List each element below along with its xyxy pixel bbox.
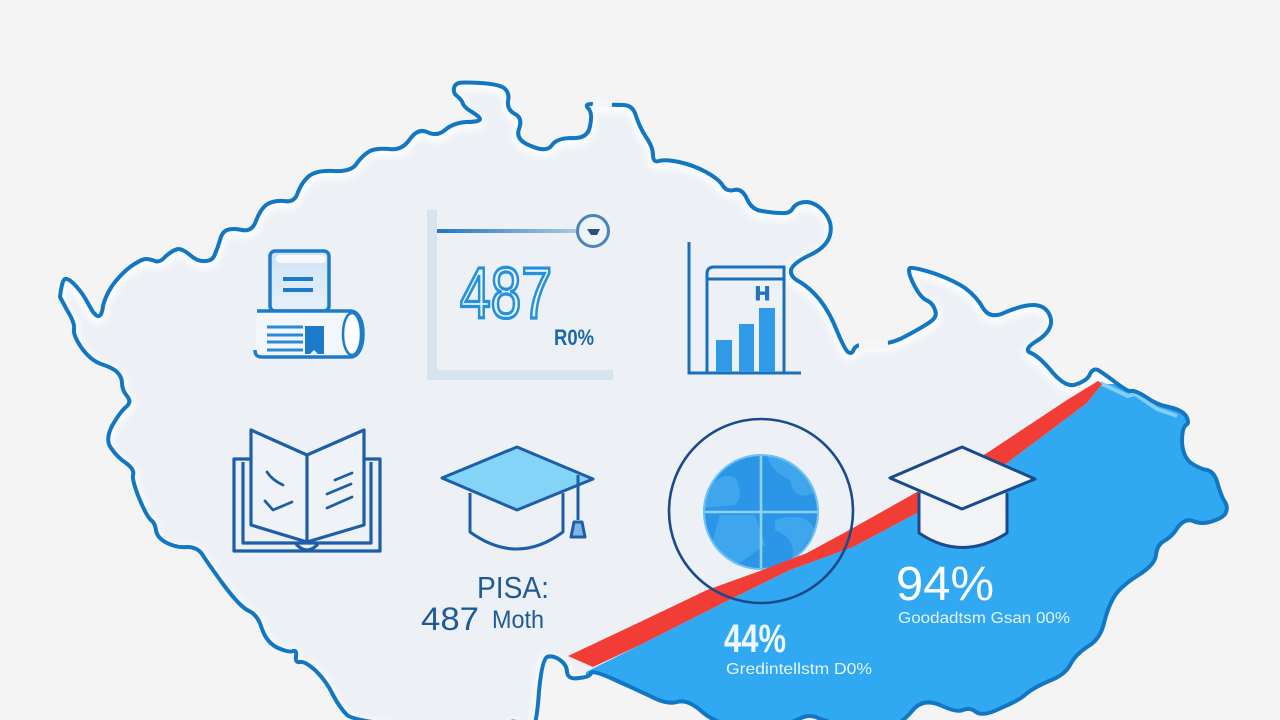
- book cover: [234, 459, 380, 551]
- lower rolled book: [255, 311, 363, 357]
- book letter mark: H: [755, 284, 770, 305]
- panel: PISA score chart: [427, 210, 613, 380]
- PISA label: [421, 570, 549, 637]
- chart book frame: [707, 267, 785, 373]
- chart axes: [689, 242, 801, 373]
- blue eastern region: [586, 383, 1280, 720]
- stat: 44 percent: [724, 617, 872, 678]
- icon: graduation cap white: [890, 447, 1035, 548]
- page marks: [265, 472, 352, 510]
- stat value: 94%: [896, 558, 994, 611]
- stat caption: Gredintellstm D0%: [726, 661, 872, 678]
- cap board: [442, 447, 593, 510]
- stat: 94 percent: [896, 558, 1070, 627]
- icon: bar chart book: [689, 242, 801, 373]
- icon: open book: [234, 430, 380, 551]
- outline gap north: [593, 102, 612, 104]
- icon: stacked books: [255, 251, 363, 357]
- icon: globe fill: [703, 454, 820, 570]
- globe sphere: [703, 454, 819, 570]
- outline gap east: [859, 344, 888, 346]
- score unit: R0%: [554, 325, 594, 350]
- stat caption: Goodadtsm Gsan 00%: [898, 610, 1070, 627]
- cap base: [470, 493, 563, 549]
- chart marker line: [437, 229, 577, 233]
- icon: globe ring: [669, 419, 853, 603]
- icon: gauge badge: [578, 216, 608, 246]
- globe rim: [704, 455, 818, 569]
- upper book: [270, 251, 329, 311]
- page spine bulge: [296, 544, 318, 550]
- chart axes: [427, 210, 613, 380]
- PISA heading: PISA:: [477, 570, 549, 605]
- book pages: [251, 430, 364, 542]
- PISA subject: Moth: [492, 606, 544, 634]
- cap tassel: [571, 475, 585, 537]
- PISA value: 487: [421, 601, 479, 637]
- cap base: [919, 493, 1007, 548]
- globe continents: [703, 455, 820, 570]
- globe grid: [703, 454, 819, 570]
- stat value: 44%: [724, 617, 786, 661]
- icon: graduation cap blue: [442, 447, 593, 549]
- bars: [716, 308, 775, 372]
- cap board: [890, 447, 1035, 509]
- score number: 487: [460, 254, 552, 334]
- red divider band: [568, 381, 1102, 667]
